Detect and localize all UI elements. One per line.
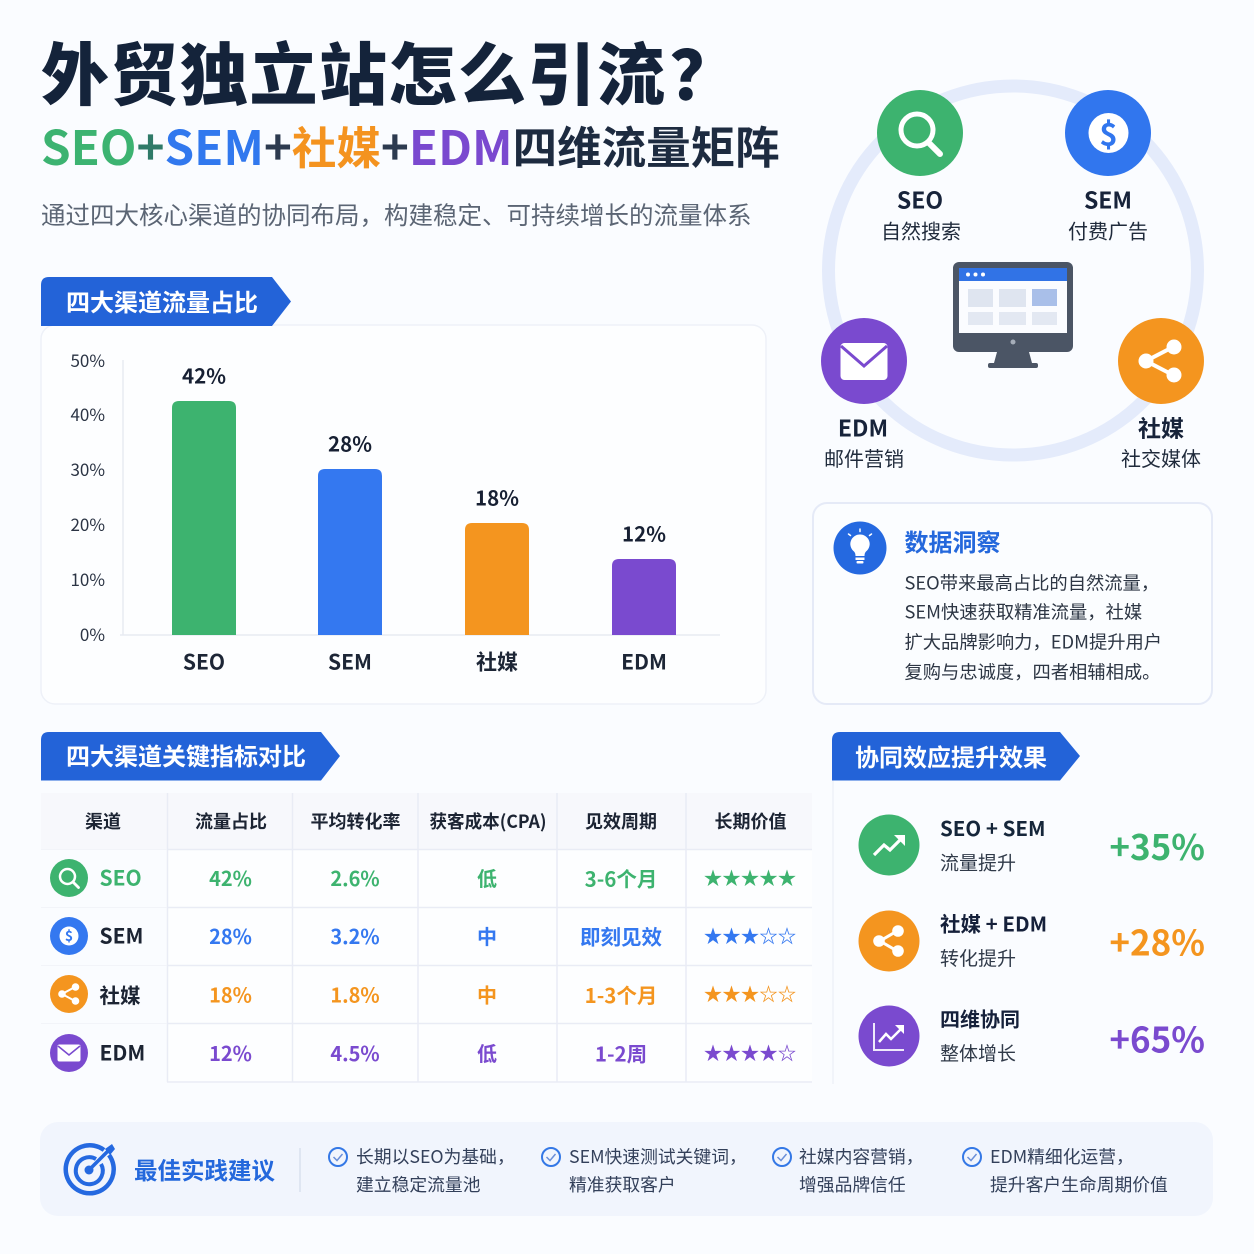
synergy: SEO + SEM: 流量提升 — [940, 848, 1016, 876]
icon: check — [773, 1148, 791, 1166]
row: SEM: SEM — [100, 920, 143, 950]
icon: SEM — [50, 917, 88, 955]
row: social media: 1-3个月 — [585, 979, 657, 1009]
icon: check — [963, 1148, 981, 1166]
panel: best practices — [40, 1122, 1213, 1216]
tip: social media: 增强品牌信任 — [799, 1171, 906, 1197]
tip: EDM: 提升客户生命周期价值 — [990, 1171, 1168, 1197]
tip: SEM: 精准获取客户 — [569, 1171, 676, 1197]
y axis labels: 0% — [80, 621, 105, 646]
icon: growth chart — [858, 1006, 920, 1066]
channel: SEO: 自然搜索 — [881, 216, 961, 244]
row: EDM: 12% — [209, 1038, 252, 1067]
panel: channel ring diagram — [821, 86, 1204, 472]
channel: EDM: 邮件营销 — [824, 443, 904, 472]
insight body: 复购与忠诚度，四者相辅相成。 — [904, 658, 1160, 684]
table header: 见效周期 — [585, 808, 657, 834]
best practices heading: 最佳实践建议 — [134, 1152, 275, 1186]
insight body: 扩大品牌影响力，EDM提升用户 — [904, 628, 1162, 654]
y axis labels: 40% — [70, 401, 105, 426]
synergy: social + EDM: +28% — [1109, 916, 1205, 966]
synergy: SEO + SEM: +35% — [1109, 820, 1205, 871]
channel: EDM — [821, 318, 907, 472]
row: EDM: EDM — [100, 1038, 145, 1068]
icon: target — [66, 1144, 115, 1193]
row: SEM: ★★★☆☆ — [704, 923, 796, 949]
heading: synergy — [832, 732, 1080, 780]
panel: metrics comparison table — [41, 732, 812, 1082]
insight body: SEM快速获取精准流量，社媒 — [904, 598, 1142, 624]
synergy: SEO + SEM — [858, 812, 1205, 876]
bar: SEM 28%: 28% — [328, 428, 372, 458]
row: social media: 中 — [477, 980, 497, 1008]
y axis labels: 50% — [70, 347, 105, 372]
y axis labels: 20% — [70, 511, 105, 536]
insight heading: 数据洞察 — [904, 523, 1000, 558]
tip: SEM — [542, 1143, 747, 1197]
row: EDM: 低 — [477, 1038, 497, 1067]
row: SEM: 即刻见效 — [580, 920, 662, 950]
heading: traffic share: 四大渠道流量占比 — [66, 283, 258, 318]
row: SEO: 3-6个月 — [585, 862, 657, 892]
row: SEO: ★★★★★ — [704, 865, 796, 891]
bar: SEM 28% — [318, 428, 382, 676]
y axis labels — [70, 347, 105, 646]
icon: trend arrow — [858, 814, 920, 876]
row: social media: ★★★☆☆ — [704, 981, 796, 1007]
bar: social 18%: 社媒 — [476, 646, 518, 676]
row: social media: 社媒 — [100, 979, 141, 1009]
panel: synergy effect — [832, 732, 1205, 1084]
table header: 长期价值 — [714, 808, 786, 834]
icon: dollar coin: $ — [1099, 110, 1118, 154]
row: SEO: 低 — [477, 863, 497, 892]
title: 外贸独立站怎么引流？ — [41, 20, 739, 120]
bar: SEO 42%: SEO — [183, 646, 225, 676]
row: SEM — [50, 917, 796, 955]
row: SEO: 2.6% — [330, 863, 380, 892]
synergy: four-dimension: +65% — [1109, 1012, 1205, 1064]
table header: 获客成本(CPA) — [430, 808, 546, 834]
bar: EDM 12%: EDM — [621, 646, 667, 676]
tip: SEM: SEM快速测试关键词， — [569, 1143, 747, 1169]
row: EDM: 4.5% — [330, 1038, 380, 1067]
icon: monitor — [953, 262, 1073, 368]
channel: SEM — [1065, 90, 1151, 244]
icon: EDM — [50, 1034, 88, 1072]
icon: light bulb — [834, 522, 886, 574]
icon: magnifier — [901, 114, 940, 154]
channel: SEO — [877, 90, 963, 244]
channel: SEM: 付费广告 — [1068, 216, 1148, 244]
channel: social media — [1118, 318, 1204, 472]
channel: SEM: SEM — [1084, 182, 1132, 216]
synergy: SEO + SEM: SEO + SEM — [940, 812, 1045, 842]
icon: SEO — [50, 859, 88, 897]
synergy: four-dimension — [858, 1004, 1205, 1066]
tip: social media: 社媒内容营销， — [799, 1143, 923, 1169]
synergy: four-dimension: 四维协同 — [940, 1004, 1020, 1032]
insight body: SEO带来最高占比的自然流量， — [904, 570, 1159, 596]
icon: check — [542, 1148, 560, 1166]
tip: SEO — [329, 1143, 515, 1197]
heading: key metrics — [41, 732, 340, 780]
icon: dollar coin — [1088, 110, 1128, 154]
heading: traffic share — [41, 277, 291, 326]
channel: social media: 社媒 — [1138, 410, 1184, 444]
row: SEM: 3.2% — [330, 921, 380, 950]
tip: social media — [773, 1143, 923, 1197]
row: social media — [50, 975, 796, 1013]
panel: data insight — [813, 503, 1212, 704]
row: social media: 18% — [209, 980, 252, 1008]
bar: SEO 42%: 42% — [182, 360, 226, 390]
row: SEO: 42% — [209, 863, 252, 892]
icon: envelope — [840, 343, 888, 380]
tip: SEO: 长期以SEO为基础， — [356, 1143, 515, 1169]
row: SEM: 中 — [477, 921, 497, 950]
row: SEM: 28% — [209, 921, 252, 950]
channel: social media: 社交媒体 — [1121, 443, 1201, 472]
tip: EDM: EDM精细化运营， — [990, 1143, 1134, 1169]
synergy: social + EDM: 社媒 + EDM — [940, 908, 1047, 938]
bar: SEM 28%: SEM — [328, 646, 372, 676]
table header: 流量占比 — [195, 808, 267, 834]
synergy: social + EDM: 转化提升 — [940, 944, 1016, 971]
bar: SEO 42% — [172, 360, 236, 676]
description: 通过四大核心渠道的协同布局，构建稳定、可持续增长的流量体系 — [41, 197, 752, 232]
row: SEO: SEO — [100, 862, 142, 892]
bar: social 18%: 18% — [475, 482, 519, 512]
icon: share — [858, 910, 920, 972]
heading: synergy: 协同效应提升效果 — [855, 738, 1047, 773]
icon: SEM: $ — [65, 926, 73, 946]
icon: social — [50, 975, 88, 1013]
panel: traffic share chart — [41, 277, 766, 704]
insight body — [904, 570, 1162, 684]
bar: EDM 12%: 12% — [622, 518, 666, 548]
heading: key metrics: 四大渠道关键指标对比 — [66, 737, 306, 772]
icon: share — [1138, 340, 1182, 382]
row: EDM: 1-2周 — [595, 1038, 647, 1068]
bar chart — [70, 347, 720, 676]
bar: social 18% — [465, 482, 529, 676]
row: social media: 1.8% — [330, 980, 380, 1008]
table header: 渠道 — [85, 808, 121, 834]
channel: SEO: SEO — [897, 182, 943, 216]
bar: EDM 12% — [612, 518, 676, 676]
icon: check — [329, 1148, 347, 1166]
y axis labels: 10% — [70, 566, 105, 591]
table grid — [41, 793, 812, 1082]
channel: EDM: EDM — [838, 410, 888, 444]
synergy: four-dimension: 整体增长 — [940, 1039, 1016, 1066]
tip: EDM — [963, 1143, 1168, 1197]
row: SEO — [50, 859, 796, 897]
row: EDM: ★★★★☆ — [704, 1040, 796, 1066]
synergy: social + EDM — [858, 908, 1205, 972]
subtitle: four-channel traffic matrix: SEO+SEM+社媒+EDM四维流量矩阵 — [41, 110, 780, 178]
table header: 平均转化率 — [310, 808, 400, 834]
row: EDM — [50, 1034, 796, 1072]
y axis labels: 30% — [70, 456, 105, 481]
table header — [85, 808, 786, 834]
tip: SEO: 建立稳定流量池 — [356, 1171, 481, 1197]
